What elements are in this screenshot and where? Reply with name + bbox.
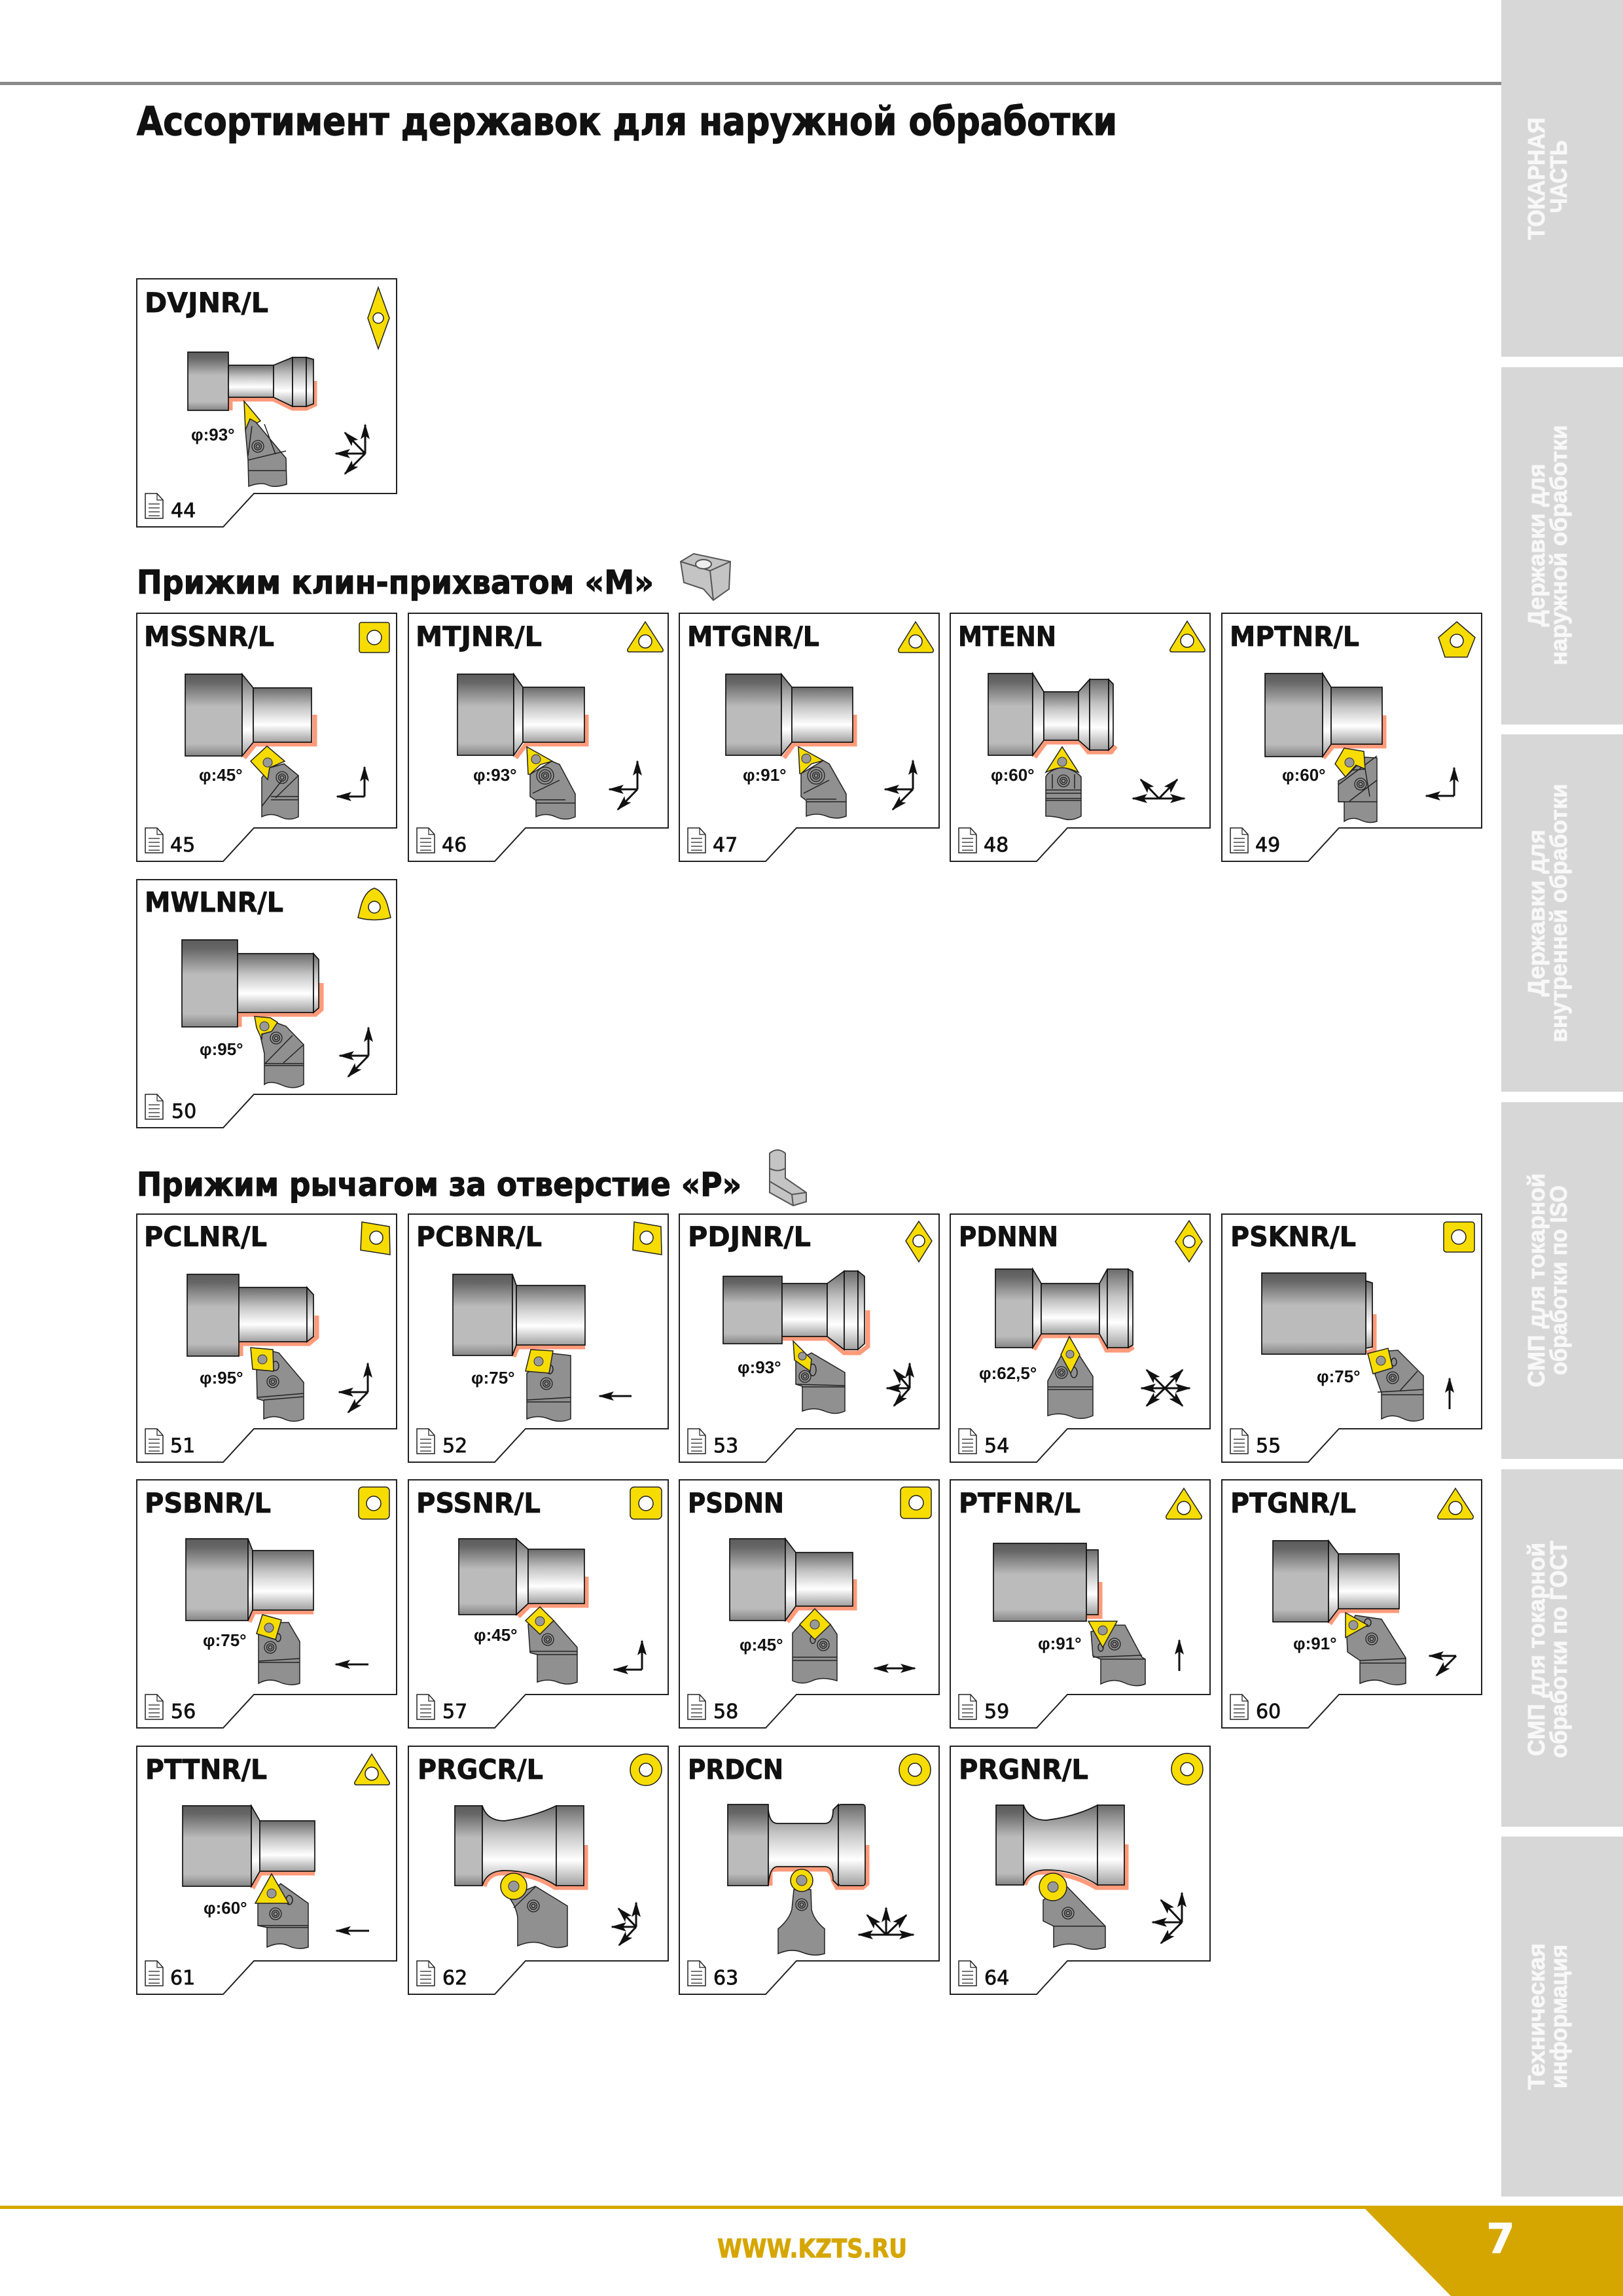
- page reference: 49: [1255, 834, 1280, 857]
- feed arrows: [1141, 1370, 1190, 1406]
- tab: internal holders: [1501, 734, 1623, 1092]
- card title: PTTNR/L: [145, 1753, 267, 1785]
- page reference: 53: [713, 1435, 738, 1458]
- page reference: 54: [984, 1435, 1009, 1458]
- page reference: [688, 828, 738, 857]
- page reference: 56: [171, 1700, 196, 1723]
- workpiece: [988, 673, 1116, 757]
- angle label: φ:45°: [474, 1625, 518, 1645]
- tool holder: [244, 401, 287, 486]
- tool holder: [255, 1016, 304, 1088]
- feed arrows: [337, 767, 365, 797]
- icon: insert shape: [628, 622, 663, 652]
- feed arrows: [1449, 1378, 1450, 1409]
- panel: PSSNR/L: [408, 1480, 668, 1728]
- tab: ISO inserts: обработки по ISO: [1545, 1185, 1572, 1375]
- workpiece: [188, 352, 315, 410]
- workpiece: [723, 1271, 868, 1353]
- feed arrows: [1178, 1640, 1181, 1671]
- page reference: 60: [1256, 1700, 1281, 1723]
- page reference: 51: [170, 1435, 195, 1458]
- sidebar navigation: [1501, 0, 1623, 2197]
- workpiece: [996, 1805, 1126, 1888]
- card title: MTJNR/L: [416, 620, 542, 653]
- page reference: 44: [171, 499, 196, 522]
- page reference: [688, 1695, 738, 1723]
- feed arrows: [1429, 1656, 1456, 1676]
- page reference: 47: [713, 834, 738, 857]
- angle label: φ:45°: [740, 1635, 783, 1655]
- workpiece: [1265, 673, 1384, 758]
- page reference: [959, 1695, 1009, 1723]
- tab: turning section: ТОКАРНАЯ: [1523, 118, 1550, 240]
- tab: turning section: ЧАСТЬ: [1545, 140, 1572, 213]
- feed arrows: [1133, 780, 1185, 798]
- panel: PTFNR/L: [950, 1480, 1210, 1728]
- tool holder: [793, 1609, 837, 1683]
- workpiece: [726, 674, 855, 758]
- card title: PRGNR/L: [959, 1753, 1088, 1785]
- angle label: φ:93°: [191, 425, 235, 444]
- tab: ISO inserts: СМП для токарной: [1523, 1173, 1550, 1388]
- page reference: 63: [713, 1967, 738, 1990]
- page reference: [1230, 1429, 1281, 1458]
- feed arrows: [339, 1363, 368, 1412]
- tool holder: [793, 1341, 845, 1414]
- icon: insert shape: [359, 1487, 389, 1519]
- page reference: 52: [442, 1435, 467, 1458]
- tab: external holders: Державки для: [1523, 463, 1550, 627]
- icon: insert shape: [355, 1754, 389, 1785]
- panel: MWLNR/L: [137, 880, 397, 1128]
- page reference: 55: [1256, 1435, 1281, 1458]
- tool holder: [257, 1615, 300, 1685]
- card title: PCBNR/L: [416, 1221, 542, 1253]
- icon: insert shape: [899, 622, 933, 653]
- card title: PDJNR/L: [688, 1221, 811, 1253]
- page reference: [417, 1429, 467, 1458]
- panel: PRGNR/L: [950, 1746, 1210, 1994]
- tool holder: [526, 1607, 577, 1684]
- angle label: φ:93°: [738, 1357, 781, 1377]
- icon: insert shape: [1171, 1753, 1203, 1785]
- tool holder: [1368, 1348, 1423, 1421]
- page reference: 64: [984, 1967, 1009, 1990]
- workpiece: [186, 1539, 313, 1622]
- tool holder: [1335, 748, 1377, 823]
- tool holder: [527, 747, 575, 819]
- icon: wedge clamp: [681, 554, 730, 600]
- page reference: 50: [171, 1100, 196, 1123]
- panel: PSDNN: [679, 1480, 939, 1728]
- workpiece: [995, 1269, 1133, 1350]
- tab: GOST inserts: СМП для токарной: [1523, 1543, 1550, 1756]
- icon: insert shape: [630, 1487, 662, 1519]
- icon: insert shape: [1166, 1488, 1202, 1519]
- workpiece: [457, 674, 586, 758]
- panel: MTGNR/L: [679, 613, 939, 861]
- page reference: [1230, 1695, 1281, 1723]
- page reference: [688, 1961, 738, 1990]
- card title: PSSNR/L: [416, 1487, 541, 1519]
- icon: insert shape: [630, 1754, 662, 1785]
- angle label: φ:60°: [991, 765, 1035, 785]
- workpiece: [455, 1806, 586, 1888]
- feed arrows: [614, 1641, 642, 1670]
- panel: MSSNR/L: [137, 613, 397, 861]
- workpiece: [730, 1539, 855, 1622]
- tool holder: [798, 747, 846, 818]
- icon: lever clamp: [770, 1150, 806, 1206]
- feed arrows: [340, 1028, 368, 1077]
- page reference: [1230, 828, 1280, 857]
- workpiece: [182, 940, 321, 1027]
- feed arrows: [887, 1363, 910, 1406]
- feed arrows: [1152, 1893, 1182, 1943]
- page reference: 58: [713, 1700, 738, 1723]
- angle label: φ:75°: [203, 1630, 247, 1650]
- panel: MPTNR/L: [1222, 613, 1482, 861]
- icon: insert shape: [1175, 1221, 1202, 1262]
- angle label: φ:45°: [199, 765, 243, 785]
- section heading: wedge clamp M: Прижим клин-прихватом «М»: [137, 564, 654, 601]
- page number: 7: [1486, 2215, 1515, 2263]
- feed arrows: [599, 1395, 632, 1397]
- tool holder: [1346, 1613, 1406, 1685]
- tab: GOST inserts: [1501, 1469, 1623, 1827]
- icon: insert shape: [1444, 1222, 1474, 1252]
- tab: internal holders: внутренней обработки: [1545, 784, 1572, 1042]
- feed arrows: [1426, 768, 1454, 796]
- page reference: [145, 828, 195, 857]
- workpiece: [1262, 1273, 1374, 1354]
- tab: GOST inserts: обработки по ГОСТ: [1545, 1541, 1572, 1758]
- tab: external holders: [1501, 367, 1623, 725]
- page reference: 57: [442, 1700, 467, 1723]
- tool holder: [1088, 1621, 1145, 1686]
- page reference: [145, 1094, 196, 1123]
- panel: PSKNR/L: [1222, 1214, 1482, 1462]
- feed arrows: [874, 1668, 915, 1669]
- page reference: [417, 828, 467, 857]
- tab: internal holders: Державки для: [1523, 829, 1550, 997]
- tool holder: [501, 1873, 567, 1948]
- icon: insert shape: [1438, 622, 1475, 657]
- card title: PTGNR/L: [1230, 1487, 1356, 1519]
- workpiece: [183, 1806, 315, 1888]
- tab: external holders: наружной обработки: [1545, 425, 1572, 665]
- tab: ISO inserts: [1501, 1102, 1623, 1459]
- feed arrows: [885, 761, 913, 810]
- page reference: 46: [442, 834, 467, 857]
- icon: insert shape: [633, 1222, 662, 1255]
- page reference: [959, 1961, 1009, 1990]
- panel: PSBNR/L: [137, 1480, 397, 1728]
- angle label: φ:91°: [1293, 1634, 1337, 1653]
- panel: PDJNR/L: [679, 1214, 939, 1462]
- page reference: [145, 1429, 195, 1458]
- panel: PRDCN: [679, 1746, 939, 1994]
- page reference: 48: [984, 834, 1008, 857]
- page reference: [959, 828, 1008, 857]
- card title: MWLNR/L: [145, 886, 283, 918]
- website: WWW.KZTS.RU: [717, 2234, 907, 2264]
- tool holder: [251, 746, 298, 819]
- icon: insert shape: [359, 622, 389, 653]
- tool holder: [255, 1874, 308, 1948]
- panel: PCLNR/L: [137, 1214, 397, 1462]
- panel: PRGCR/L: [408, 1746, 668, 1994]
- page reference: [145, 493, 196, 522]
- page reference: 61: [170, 1967, 195, 1990]
- icon: insert shape: [361, 1222, 390, 1255]
- card title: PRGCR/L: [418, 1753, 543, 1785]
- workpiece: [187, 1274, 317, 1356]
- feed arrows: [859, 1908, 914, 1935]
- tool holder: [251, 1348, 304, 1422]
- page reference: [145, 1695, 196, 1723]
- panel: PCBNR/L: [408, 1214, 668, 1462]
- feed arrows: [336, 425, 365, 474]
- panel: PTGNR/L: [1222, 1480, 1482, 1728]
- tool holder: [526, 1350, 571, 1422]
- workpiece: [453, 1274, 585, 1357]
- page reference: [145, 1961, 195, 1990]
- card title: PRDCN: [688, 1753, 783, 1785]
- workpiece: [1273, 1541, 1399, 1624]
- page reference: [417, 1961, 467, 1990]
- feed arrows: [336, 1929, 369, 1932]
- panel: PTTNR/L: [137, 1746, 397, 1994]
- icon: insert shape: [358, 888, 391, 920]
- card title: MPTNR/L: [1230, 620, 1359, 653]
- card title: PSDNN: [688, 1487, 784, 1519]
- workpiece: [993, 1543, 1100, 1621]
- angle label: φ:95°: [200, 1368, 243, 1388]
- section heading: lever clamp P: [137, 1150, 806, 1206]
- panel: PDNNN: [950, 1214, 1210, 1462]
- card title: PSKNR/L: [1230, 1221, 1356, 1253]
- tab: technical information: информация: [1545, 1945, 1572, 2089]
- page title: Ассортимент державок для наружной обработки: [137, 99, 1117, 145]
- angle label: φ:62,5°: [979, 1363, 1037, 1383]
- card title: MSSNR/L: [144, 620, 274, 653]
- tool holder: [1039, 1873, 1105, 1949]
- angle label: φ:95°: [200, 1039, 243, 1059]
- section heading: lever clamp P: Прижим рычагом за отверстие «Р»: [137, 1166, 741, 1204]
- angle label: φ:60°: [204, 1898, 247, 1918]
- card title: MTENN: [958, 620, 1056, 653]
- header rule: [0, 82, 1501, 85]
- feed arrows: [609, 761, 637, 810]
- workpiece: [459, 1539, 586, 1617]
- panel: MTJNR/L: [408, 613, 668, 861]
- icon: insert shape: [899, 1754, 931, 1785]
- footer bar with corner: [0, 2206, 1623, 2296]
- feed arrows: [612, 1903, 636, 1945]
- card title: DVJNR/L: [145, 287, 268, 319]
- page reference: [959, 1429, 1009, 1458]
- page reference: [417, 1695, 467, 1723]
- tool holder: [1046, 747, 1081, 819]
- tab: technical information: Техническая: [1523, 1943, 1550, 2090]
- page reference: 62: [442, 1967, 467, 1990]
- page reference: 59: [984, 1700, 1009, 1723]
- tool holder: [1048, 1336, 1093, 1418]
- feed arrows: [336, 1664, 368, 1665]
- icon: insert shape: [368, 287, 389, 349]
- angle label: φ:91°: [1038, 1634, 1082, 1653]
- panel: MTENN: [950, 613, 1210, 861]
- tool holder: [778, 1869, 825, 1955]
- panel: DVJNR/L: [137, 279, 397, 527]
- angle label: φ:75°: [471, 1368, 515, 1388]
- icon: insert shape: [1438, 1488, 1473, 1519]
- icon: insert shape: [906, 1221, 932, 1262]
- tab: turning section: [1501, 0, 1623, 357]
- angle label: φ:75°: [1317, 1367, 1361, 1386]
- icon: insert shape: [1170, 621, 1205, 652]
- workpiece: [728, 1804, 867, 1888]
- card title: PDNNN: [959, 1221, 1058, 1253]
- angle label: φ:93°: [473, 765, 517, 785]
- icon: insert shape: [901, 1487, 931, 1518]
- card title: MTGNR/L: [687, 620, 819, 653]
- angle label: φ:91°: [743, 765, 787, 785]
- angle label: φ:60°: [1282, 765, 1326, 785]
- workpiece: [185, 674, 315, 758]
- card title: PCLNR/L: [144, 1221, 267, 1253]
- card title: PSBNR/L: [145, 1487, 271, 1519]
- page reference: [688, 1429, 738, 1458]
- card title: PTFNR/L: [959, 1487, 1080, 1519]
- page reference: 45: [170, 834, 195, 857]
- tab: technical information: [1501, 1837, 1623, 2197]
